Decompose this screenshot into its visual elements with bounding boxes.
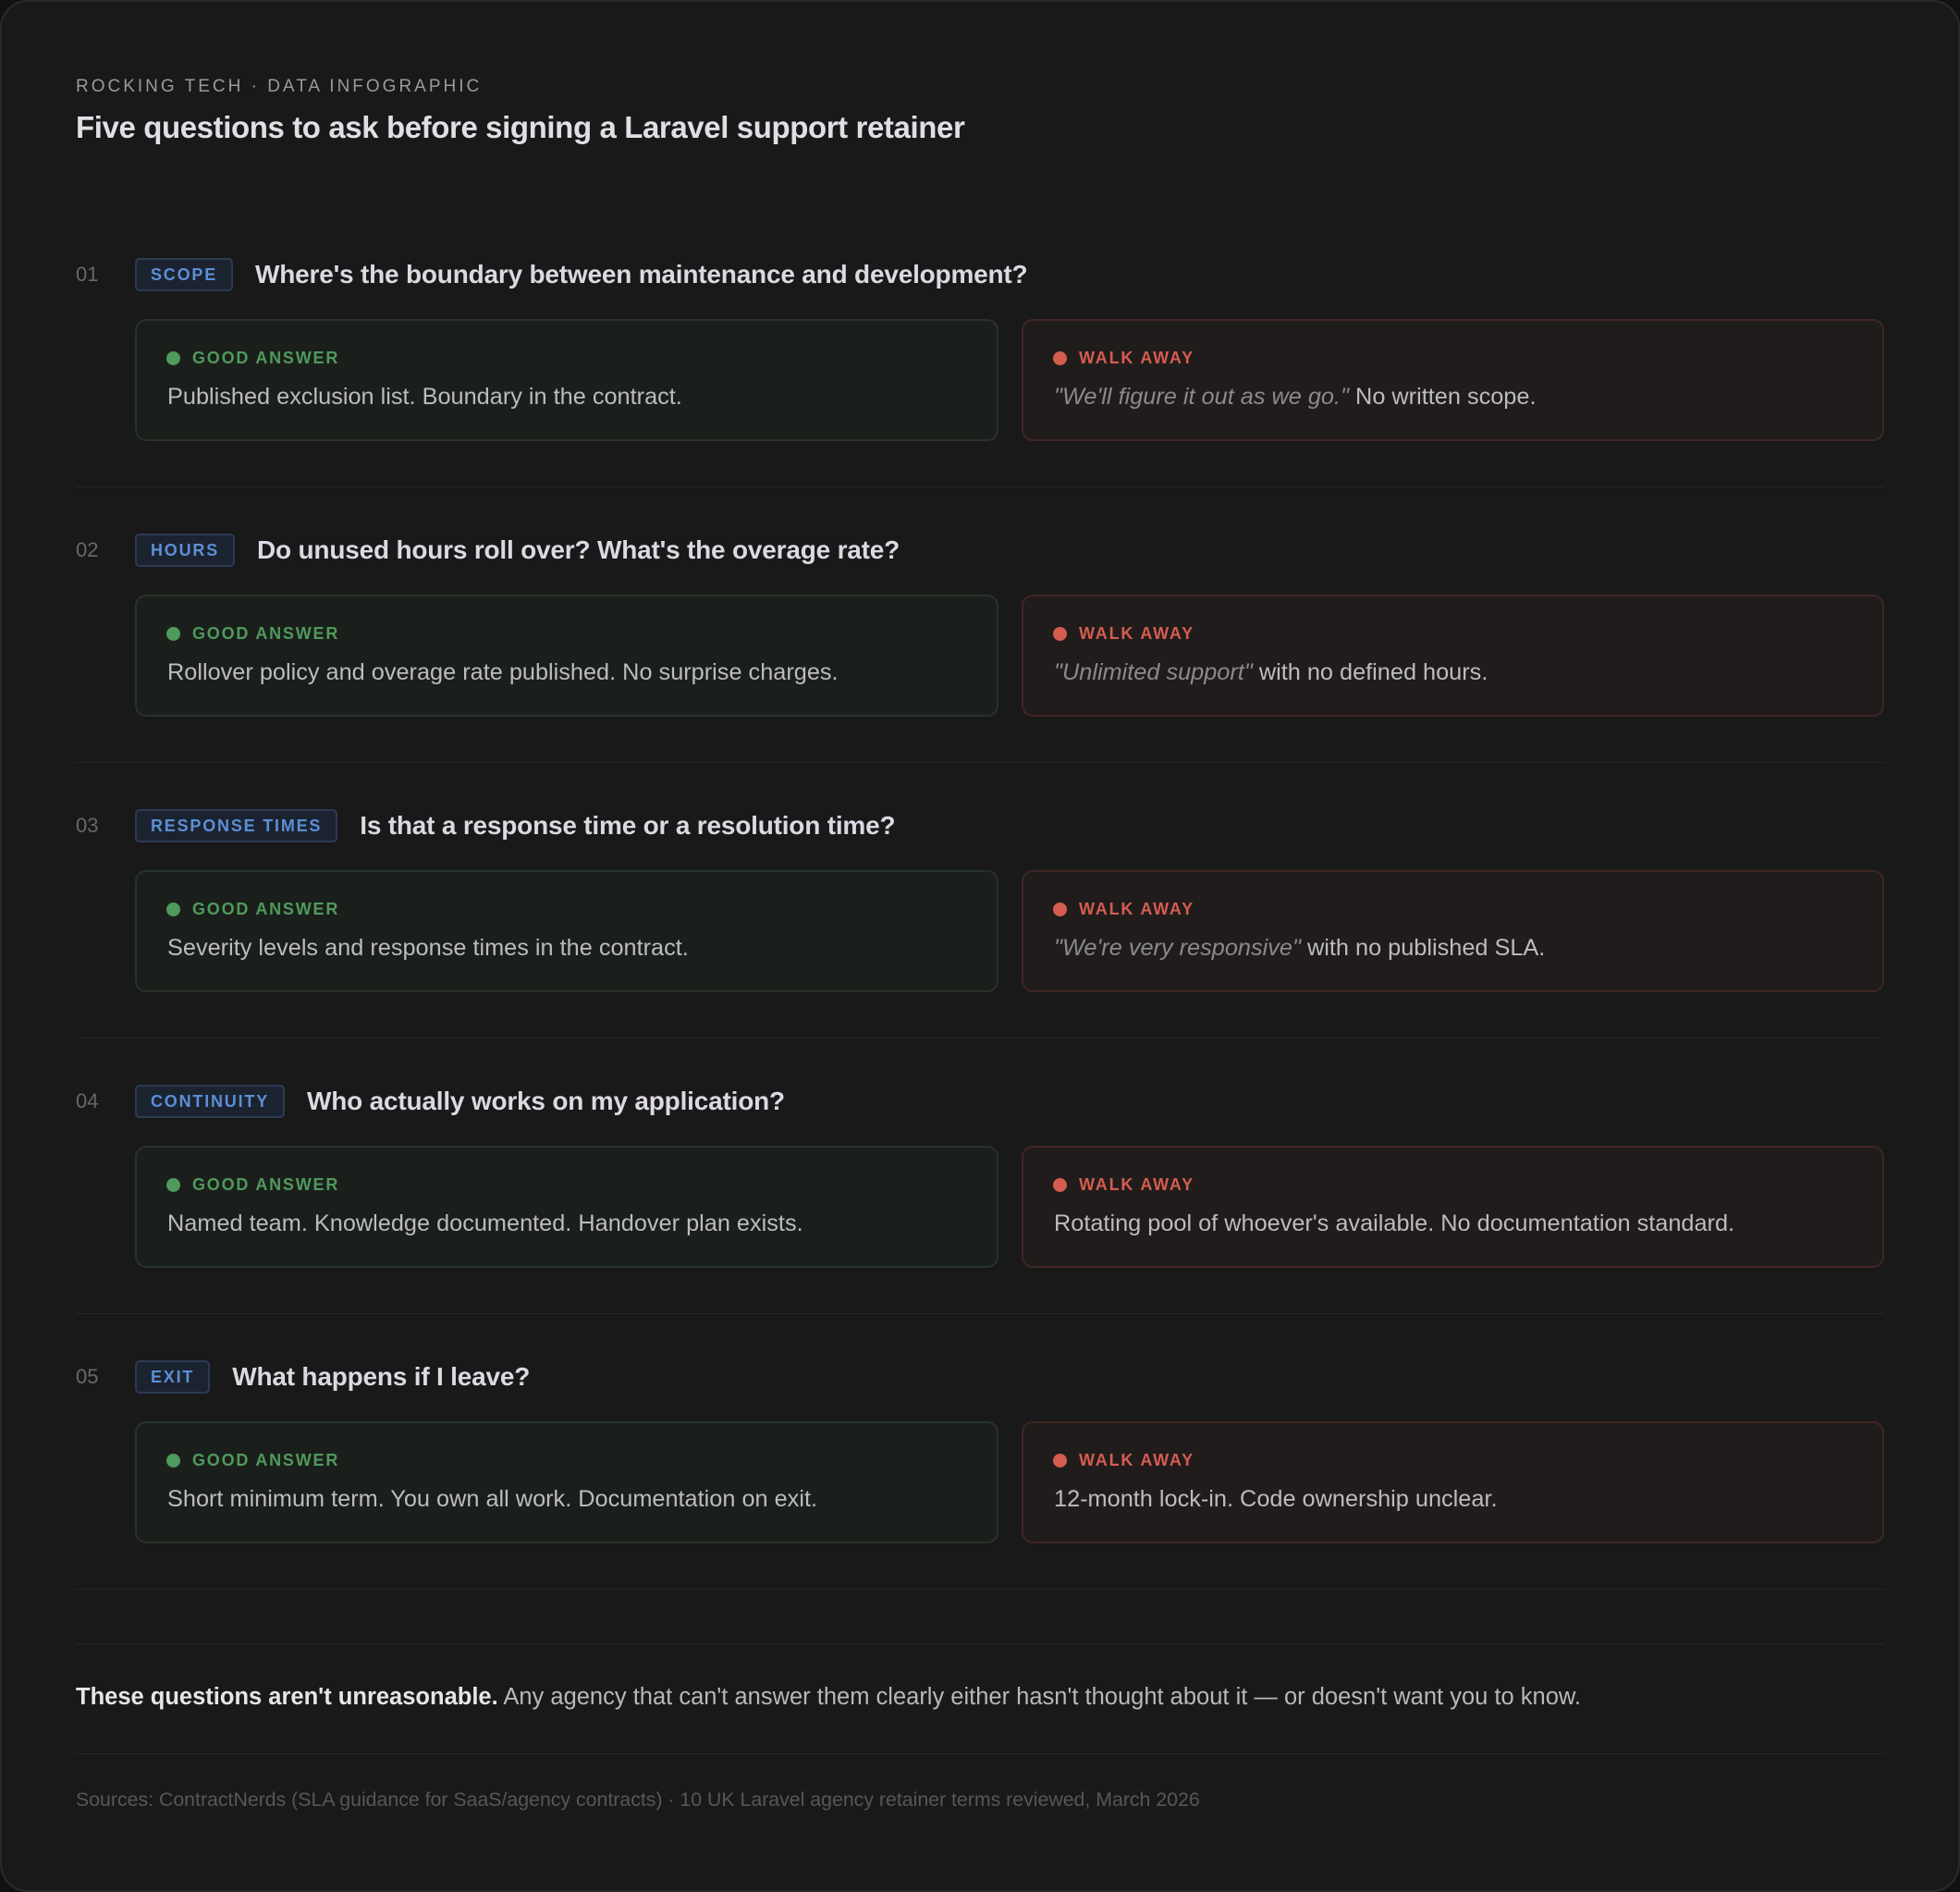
question 05: EXIT [151, 1367, 194, 1385]
question 01: Where's the boundary between maintenance and development? [255, 260, 1027, 289]
question 05: What happens if I leave? [232, 1362, 530, 1391]
card: walk away 01: "We'll figure it out as we go." No written scope. [1054, 384, 1536, 410]
card: good answer 01: GOOD ANSWER [192, 349, 339, 367]
row 04: continuity [76, 1085, 1884, 1268]
card: walk away 03 [1022, 870, 1884, 992]
card: good answer 03: GOOD ANSWER [192, 900, 339, 918]
sources: Sources: ContractNerds (SLA guidance for SaaS/agency contracts) · 10 UK Laravel agency retainer terms reviewed, March 2026 [76, 1788, 1200, 1811]
card: walk away 05 [1022, 1421, 1884, 1543]
card: good answer 01: Published exclusion list. Boundary in the contract. [167, 384, 682, 410]
question 03: RESPONSE TIMES [151, 816, 322, 834]
row 03: response times [76, 809, 1884, 992]
number 05: 05 [76, 1365, 98, 1388]
card: walk away 03: "We're very responsive" with no published SLA. [1054, 935, 1545, 961]
title: Five questions to ask before signing a Laravel support retainer [76, 110, 964, 144]
number 04: 04 [76, 1089, 98, 1112]
card: good answer 04: Named team. Knowledge documented. Handover plan exists. [167, 1210, 803, 1236]
question 02: Do unused hours roll over? What's the overage rate? [257, 535, 900, 564]
question 04 [135, 1085, 785, 1118]
card: good answer 02 [135, 595, 998, 717]
card: walk away 05: 12-month lock-in. Code ownership unclear. [1054, 1486, 1498, 1512]
kicker: ROCKING TECH · DATA INFOGRAPHIC [76, 77, 482, 96]
card: good answer 04: GOOD ANSWER [192, 1175, 339, 1194]
card: walk away 04: WALK AWAY [1079, 1175, 1194, 1194]
number 02: 02 [76, 538, 98, 561]
card: walk away 02: WALK AWAY [1079, 624, 1194, 643]
card: walk away 04 [1022, 1146, 1884, 1268]
card: good answer 02: GOOD ANSWER [192, 624, 339, 643]
question 01: SCOPE [151, 264, 217, 283]
card: good answer 05 [135, 1421, 998, 1543]
row 02: hours [76, 534, 1884, 717]
card: good answer 02: Rollover policy and overage rate published. No surprise charges. [167, 659, 839, 685]
question 04: CONTINUITY [151, 1091, 269, 1110]
card: walk away 01 [1022, 319, 1884, 441]
row 05: exit [76, 1360, 1884, 1543]
number 01: 01 [76, 263, 98, 286]
card: good answer 05: GOOD ANSWER [192, 1451, 339, 1469]
number 03: 03 [76, 814, 98, 837]
card: walk away 05: WALK AWAY [1079, 1451, 1194, 1469]
question 02: HOURS [151, 540, 219, 559]
card: walk away 04: Rotating pool of whoever's available. No documentation standard. [1054, 1210, 1734, 1236]
card: good answer 05: Short minimum term. You own all work. Documentation on exit. [167, 1486, 817, 1512]
question 03 [135, 809, 895, 842]
question 04: Who actually works on my application? [307, 1087, 785, 1115]
card: good answer 03 [135, 870, 998, 992]
card: good answer 03: Severity levels and response times in the contract. [167, 935, 689, 961]
card: good answer 01 [135, 319, 998, 441]
card: good answer 04 [135, 1146, 998, 1268]
conclusion statement: These questions aren't unreasonable. Any agency that can't answer them clearly either hasn't thought about it — or doesn't want you to know. [76, 1684, 1581, 1710]
question 05 [135, 1360, 530, 1394]
card: walk away 01: WALK AWAY [1079, 349, 1194, 367]
question 03: Is that a response time or a resolution time? [360, 811, 895, 840]
card: walk away 03: WALK AWAY [1079, 900, 1194, 918]
row 01: scope [76, 258, 1884, 441]
card: walk away 02 [1022, 595, 1884, 717]
card: walk away 02: "Unlimited support" with no defined hours. [1054, 659, 1488, 685]
